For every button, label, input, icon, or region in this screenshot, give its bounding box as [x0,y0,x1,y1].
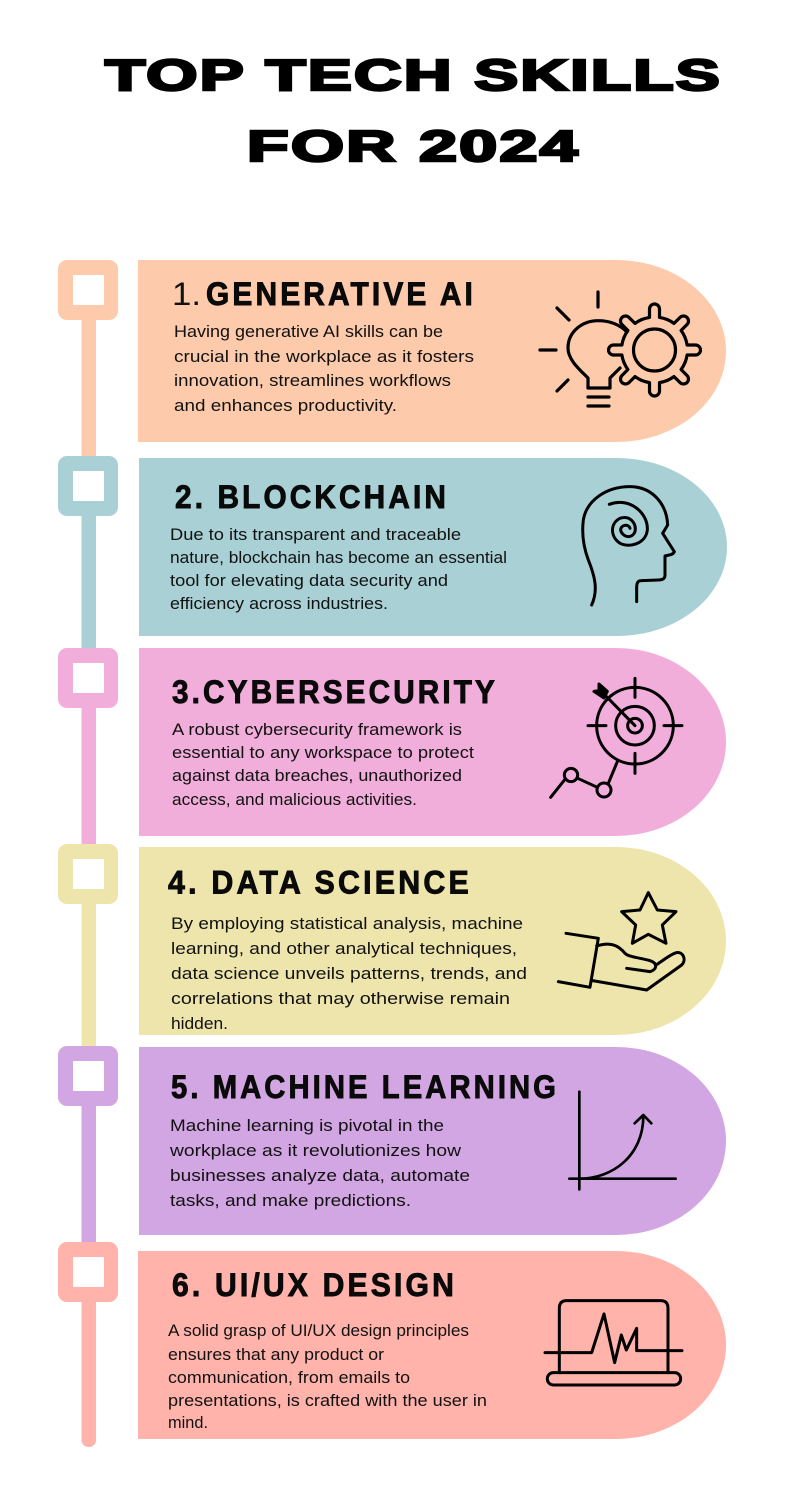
timeline marker 2 [58,456,118,650]
icon: laptop with pulse [545,1301,682,1385]
text: machine learning [169,1117,470,1210]
heading: data science: 4. DATA SCIENCE [168,864,472,900]
title: FOR 2024 [247,123,580,171]
text: data science [171,915,527,1033]
icon: growth curve chart [569,1092,676,1189]
text: generative AI [174,323,474,415]
text: cybersecurity [172,721,474,809]
panel: blockchain [139,458,727,636]
text: data science: data science unveils patterns, trends, and [171,965,527,983]
text: blockchain [170,526,507,613]
text: cybersecurity: essential to any workspace to protect [172,744,474,762]
icon: head with spiral [583,487,674,605]
text: blockchain: Due to its transparent and traceable [170,526,461,544]
timeline marker 6 [58,1242,118,1447]
timeline marker 5 [58,1046,118,1244]
text: UI/UX design: communication, from emails to [168,1369,410,1387]
text: cybersecurity: A robust cybersecurity framework is [172,721,462,739]
text: data science: correlations that may otherwise remain [171,990,510,1008]
text: data science: hidden. [171,1015,228,1033]
text: UI/UX design: A solid grasp of UI/UX design principles [168,1322,469,1340]
text: UI/UX design: presentations, is crafted with the user in [168,1392,487,1410]
text: UI/UX design: ensures that any product or [168,1346,385,1364]
text: cybersecurity: against data breaches, unauthorized [172,767,462,785]
timeline marker 4 [58,844,118,1048]
icon: hand holding star [558,893,684,990]
icon: light bulb and gear [540,292,700,406]
heading: machine learning: 5. MACHINE LEARNING [171,1069,559,1105]
text: UI/UX design: mind. [168,1414,208,1432]
heading: cybersecurity: 3.CYBERSECURITY [172,674,498,710]
panel: machine learning [139,1047,726,1235]
text: UI/UX design [168,1322,487,1432]
text: generative AI: crucial in the workplace as it fosters [174,348,474,366]
text: blockchain: nature, blockchain has become an essential [170,549,507,567]
text: data science: learning, and other analytical techniques, [171,940,517,958]
text: blockchain: efficiency across industries. [170,595,388,613]
text: generative AI: innovation, streamlines workflows [174,372,451,390]
text: machine learning: Machine learning is pivotal in the [170,1117,444,1135]
icon: target and chart [551,678,682,797]
text: machine learning: workplace as it revolutionizes how [169,1142,461,1160]
timeline marker 3 [58,648,118,846]
heading: blockchain: 2. BLOCKCHAIN [175,479,449,515]
text: blockchain: tool for elevating data security and [170,572,448,590]
title [105,52,722,171]
timeline [58,260,118,1447]
panel: cybersecurity [139,648,726,836]
panel: UI/UX design [138,1251,726,1439]
text: generative AI: Having generative AI skills can be [174,323,443,341]
panel: generative AI [138,260,726,442]
text: machine learning: businesses analyze data, automate [170,1167,470,1185]
heading: generative AI: GENERATIVE AI [206,276,476,312]
timeline marker 1 [58,260,118,458]
text: cybersecurity: access, and malicious activities. [172,791,417,809]
title: TOP TECH SKILLS [105,52,722,100]
text: data science: By employing statistical analysis, machine [171,915,523,933]
heading: generative AI: 1. [172,276,201,312]
text: machine learning: tasks, and make predictions. [170,1192,411,1210]
text: generative AI: and enhances productivity. [174,397,397,415]
panel: data science [139,847,726,1035]
heading: UI/UX design: 6. UI/UX DESIGN [172,1267,457,1303]
